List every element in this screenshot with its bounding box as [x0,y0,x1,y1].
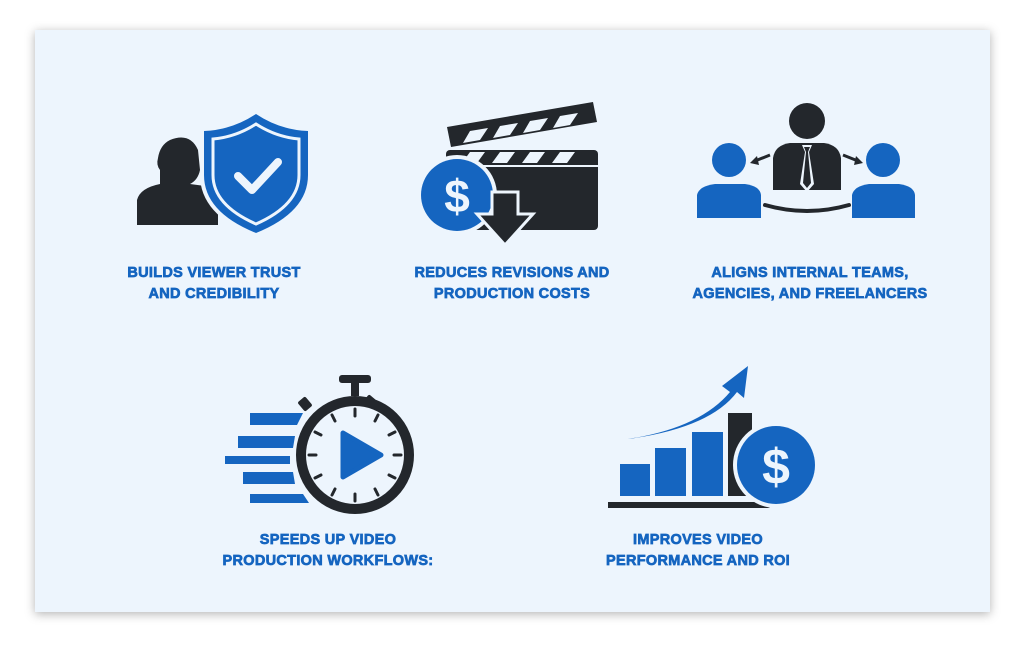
text: aligns internal teams: AGENCIES, AND FREELANCERS [693,286,927,302]
text: builds viewer trust: AND CREDIBILITY [149,286,280,302]
text: improves video: PERFORMANCE AND ROI [606,553,790,569]
icon: growth chart with dollar [608,366,819,508]
text: builds viewer trust: BUILDS VIEWER TRUST [127,265,301,281]
icon: clapperboard with dollar [417,102,598,245]
text: reduces revisions: PRODUCTION COSTS [434,286,590,302]
text: reduces revisions: REDUCES REVISIONS AND [414,265,610,281]
text: speeds up video: SPEEDS UP VIDEO [260,532,396,548]
icon: person with shield [137,110,312,237]
text: aligns internal teams: ALIGNS INTERNAL TEAMS, [711,265,909,281]
icon: clapperboard with dollar: $ [444,170,470,222]
text: speeds up video: PRODUCTION WORKFLOWS: [223,553,433,569]
text: improves video: IMPROVES VIDEO [633,532,763,548]
icon: growth chart with dollar: $ [762,439,790,495]
icon: stopwatch with play [225,375,409,509]
icon: team alignment [697,103,915,218]
